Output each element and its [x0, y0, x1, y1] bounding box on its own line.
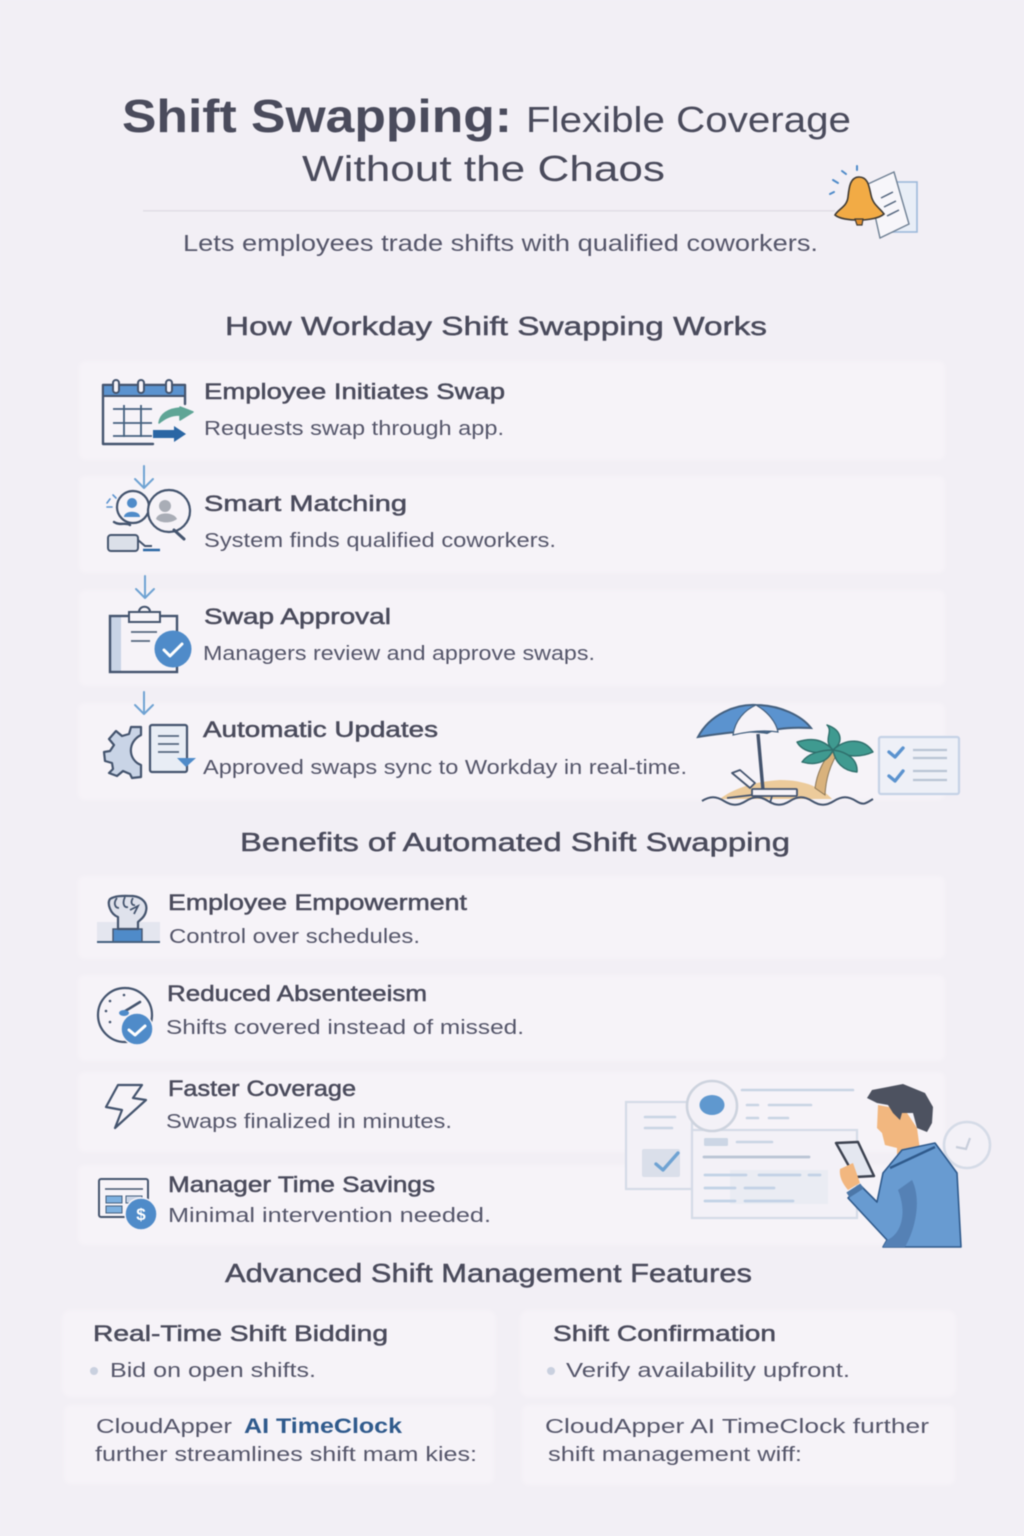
step 2 title: Smart Matching	[204, 491, 407, 516]
note text left: CloudApper	[96, 1416, 232, 1438]
heading: advanced features: Advanced Shift Management Features	[225, 1258, 752, 1288]
bullet	[90, 1367, 98, 1375]
icon: raised fist	[97, 896, 160, 942]
icon: dashboard with dollar: $	[136, 1205, 146, 1224]
panel: step 3	[79, 590, 945, 686]
heading: benefits: Benefits of Automated Shift Swapping	[240, 827, 790, 857]
absenteeism description: Shifts covered instead of missed.	[166, 1017, 524, 1039]
manager savings title: Manager Time Savings	[168, 1172, 435, 1197]
panel: real-time shift bidding	[62, 1310, 496, 1397]
faster coverage description: Swaps finalized in minutes.	[166, 1111, 452, 1133]
confirmation description: Verify availability upfront.	[566, 1360, 850, 1382]
panel: employee empowerment	[78, 876, 945, 959]
arrow: step 3 to 4	[135, 692, 153, 714]
title	[122, 90, 851, 189]
note text right: shift management wiff:	[548, 1444, 802, 1466]
arrow: step 1 to 2	[135, 466, 153, 488]
confirmation title: Shift Confirmation	[553, 1321, 776, 1346]
icon: clock with check	[98, 988, 153, 1045]
faster coverage title: Faster Coverage	[168, 1076, 356, 1101]
icon: bell and documents	[830, 166, 917, 238]
note text right: CloudApper AI TimeClock further	[545, 1416, 929, 1438]
note text left	[95, 1415, 477, 1466]
manager savings description: Minimal intervention needed.	[168, 1205, 491, 1227]
absenteeism title: Reduced Absenteeism	[167, 981, 427, 1006]
step 3 title: Swap Approval	[204, 604, 391, 629]
note text right	[545, 1416, 929, 1466]
note text left: further streamlines shift mam kies:	[95, 1444, 477, 1466]
bidding description: Bid on open shifts.	[110, 1360, 316, 1382]
bidding title: Real-Time Shift Bidding	[93, 1321, 388, 1346]
icon: smart matching	[107, 490, 190, 551]
heading: how it works: How Workday Shift Swapping Works	[225, 311, 767, 341]
step 3 description: Managers review and approve swaps.	[203, 643, 595, 665]
panel: step 1	[79, 361, 945, 460]
step 1 title: Employee Initiates Swap	[204, 379, 505, 404]
panel: CloudApper note right	[522, 1405, 955, 1485]
title: Shift Swapping:	[122, 90, 512, 142]
illustration: checklist card	[879, 737, 959, 794]
illustration: person using phone with app panels	[626, 1081, 990, 1247]
title: Flexible Coverage	[526, 99, 851, 140]
icon: lightning bolt	[106, 1085, 146, 1128]
panel: faster coverage	[78, 1072, 945, 1152]
icon: dashboard with dollar	[99, 1179, 157, 1230]
step 4 description: Approved swaps sync to Workday in real-time.	[203, 757, 687, 779]
panel: manager time savings	[78, 1165, 945, 1245]
step 4 title: Automatic Updates	[203, 717, 438, 742]
bullet	[547, 1367, 555, 1375]
subtitle: Lets employees trade shifts with qualified coworkers.	[183, 230, 818, 256]
arrow: step 2 to 3	[136, 576, 154, 598]
panel: step 4	[78, 703, 945, 800]
icon: gear and document	[104, 725, 196, 778]
icon: clipboard approval	[110, 607, 192, 672]
icon: calendar swap	[103, 380, 193, 444]
illustration: beach island	[698, 705, 873, 805]
title: Without the Chaos	[302, 148, 665, 189]
step 1 description: Requests swap through app.	[204, 418, 504, 440]
empowerment description: Control over schedules.	[169, 926, 420, 948]
step 2 description: System finds qualified coworkers.	[204, 530, 556, 552]
panel: reduced absenteeism	[78, 975, 945, 1061]
panel: step 2	[79, 476, 945, 573]
panel: CloudApper note left	[64, 1405, 494, 1484]
panel: shift confirmation	[520, 1310, 956, 1397]
empowerment title: Employee Empowerment	[168, 890, 467, 915]
note text left: AI TimeClock	[244, 1415, 402, 1438]
